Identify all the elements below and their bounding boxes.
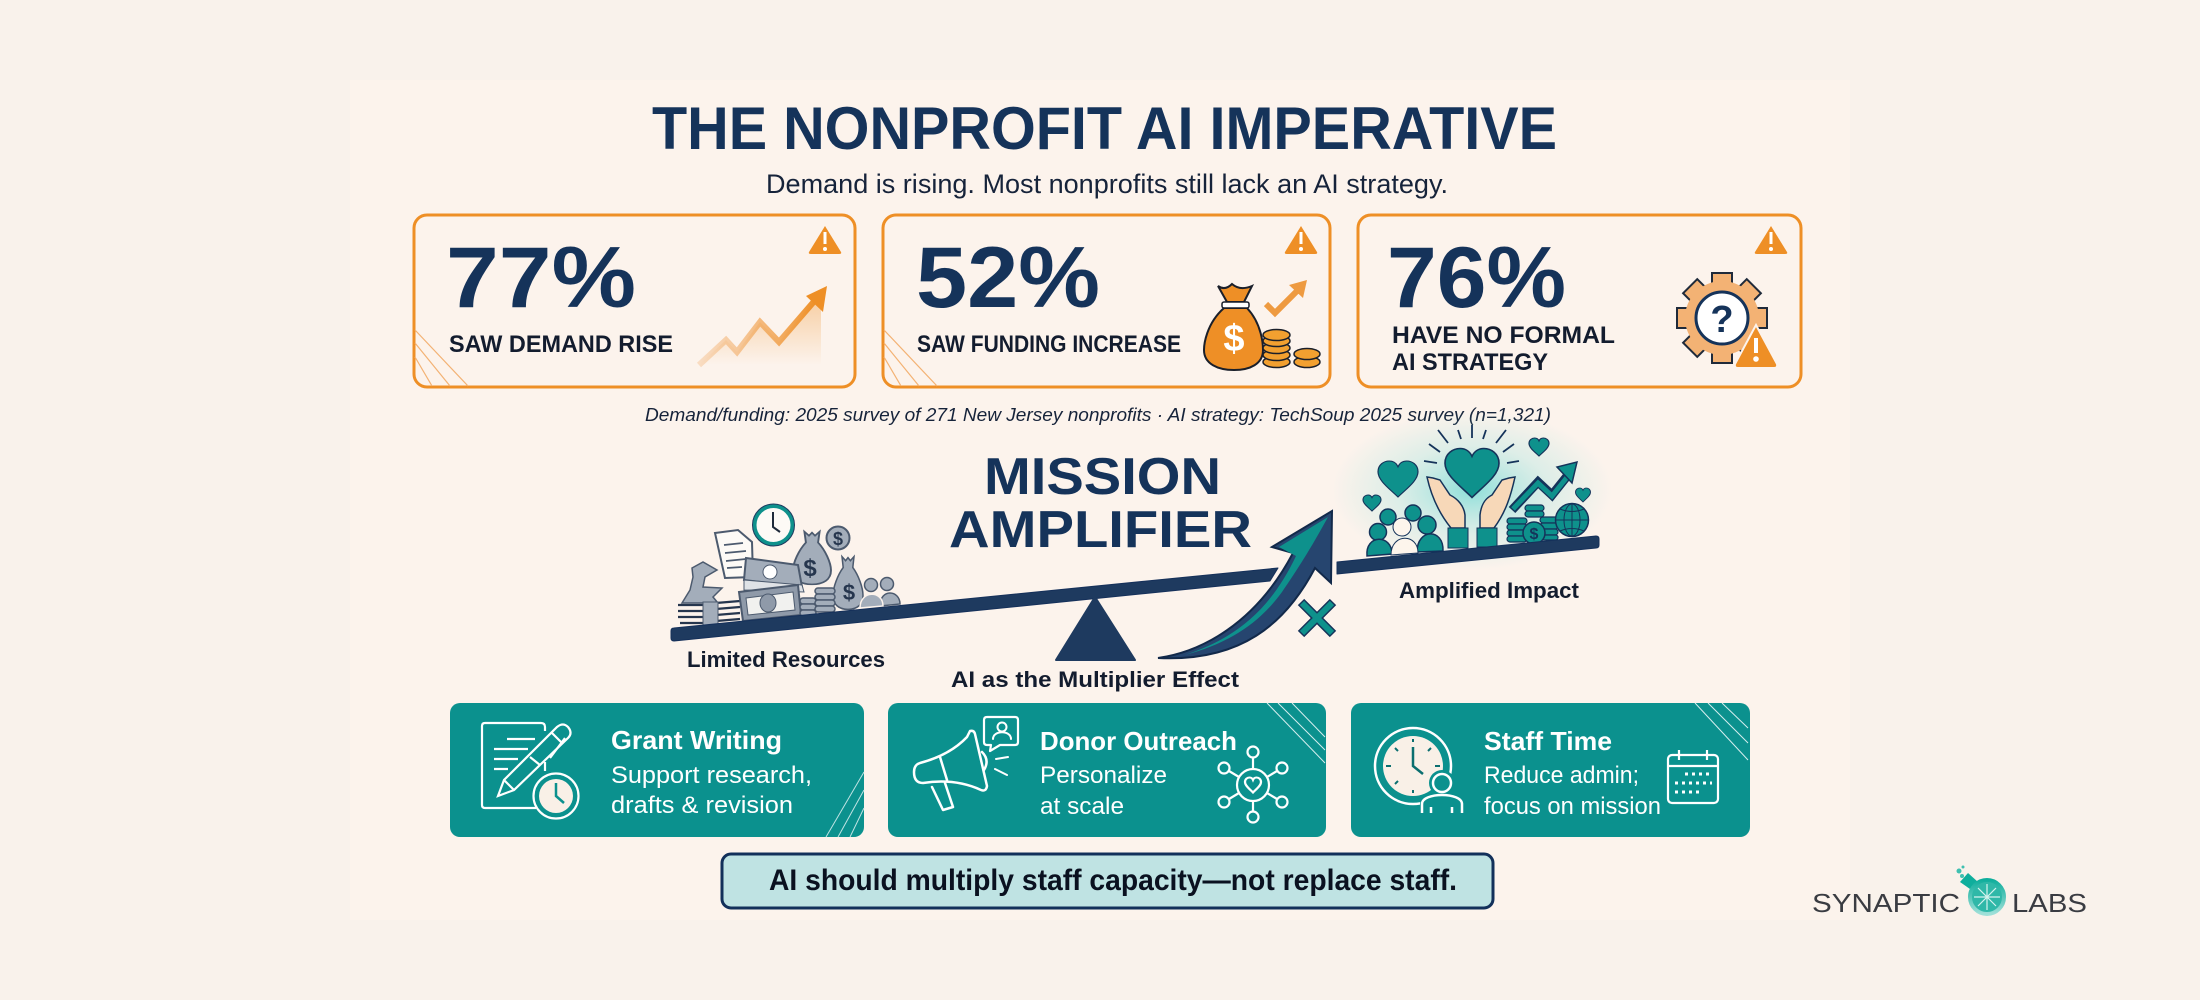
card body: Personalize [1040, 762, 1167, 789]
icon: clock and person [1375, 728, 1464, 816]
label: limited resources: Limited Resources [687, 647, 885, 672]
stat label line two: AI STRATEGY [1392, 349, 1548, 376]
seesaw beam [671, 536, 1599, 641]
panel: donor outreach [888, 703, 1326, 837]
stat number: 77% [446, 230, 636, 326]
icon: gear with question and warning: ? [1710, 299, 1734, 341]
card body: focus on mission [1484, 793, 1661, 820]
icon: alert [1755, 226, 1787, 254]
icon: multiply sign [1301, 602, 1333, 634]
panel: demand stat [414, 215, 855, 387]
card body: drafts & revision [611, 792, 793, 819]
label: amplified impact: Amplified Impact [1399, 578, 1580, 603]
card body: Reduce admin; [1484, 762, 1639, 789]
card body: Support research, [611, 762, 812, 789]
panel: grant writing [450, 703, 864, 837]
panel: AI strategy stat [1358, 215, 1801, 387]
icon: megaphone [914, 717, 1018, 810]
card heading: Staff Time [1484, 726, 1612, 756]
card body: at scale [1040, 793, 1124, 820]
logo: synaptic labs [1812, 866, 2087, 918]
callout banner: AI should multiply staff capacity—not replace staff. [769, 864, 1457, 897]
logo: synaptic labs: SYNAPTIC [1812, 888, 1960, 918]
seesaw fulcrum [1056, 597, 1135, 660]
label: multiplier effect: AI as the Multiplier Effect [951, 667, 1240, 692]
stat label: HAVE NO FORMAL [1392, 322, 1615, 349]
card heading: Donor Outreach [1040, 726, 1237, 756]
arrow: AI multiplier [1158, 511, 1332, 658]
icon: alert [809, 226, 841, 254]
icon: alert [1285, 226, 1317, 254]
panel: funding stat [883, 215, 1330, 387]
card body [1040, 762, 1167, 820]
icon: donor network [1218, 746, 1288, 822]
panel: staff time [1351, 703, 1750, 837]
icon: limited resources pile: $ [833, 529, 843, 549]
source note: Demand/funding: 2025 survey of 271 New Jersey nonprofits · AI strategy: TechSoup 2025 survey (n=1,321) [645, 404, 1551, 425]
card body [611, 762, 812, 819]
icon: amplified impact cluster [1332, 410, 1612, 570]
callout banner [722, 854, 1493, 908]
icon: rising trend [699, 286, 827, 365]
icon: limited resources pile: $ [843, 580, 855, 605]
heading: mission amplifier: AMPLIFIER [949, 501, 1252, 559]
card body [1484, 762, 1661, 820]
stat label: SAW FUNDING INCREASE [917, 331, 1181, 358]
title: THE NONPROFIT AI IMPERATIVE [652, 95, 1557, 162]
logo: synaptic labs: LABS [2012, 888, 2087, 918]
icon: limited resources pile: $ [803, 555, 817, 582]
icon: document, pencil and clock [482, 723, 578, 818]
icon: money bag and coins [1204, 280, 1320, 370]
stat number: 76% [1387, 230, 1566, 326]
subtitle: Demand is rising. Most nonprofits still lack an AI strategy. [766, 169, 1448, 199]
icon: gear with question and warning [1677, 273, 1777, 368]
icon: calendar [1668, 750, 1718, 803]
card heading: Grant Writing [611, 725, 782, 755]
heading: mission amplifier: MISSION [984, 448, 1221, 506]
icon: money bag and coins: $ [1223, 318, 1245, 360]
icon: limited resources pile [678, 504, 900, 625]
stat label: SAW DEMAND RISE [449, 331, 673, 358]
heading: mission amplifier [949, 448, 1252, 559]
stat number: 52% [916, 230, 1100, 326]
icon: amplified impact cluster: $ [1530, 526, 1539, 543]
